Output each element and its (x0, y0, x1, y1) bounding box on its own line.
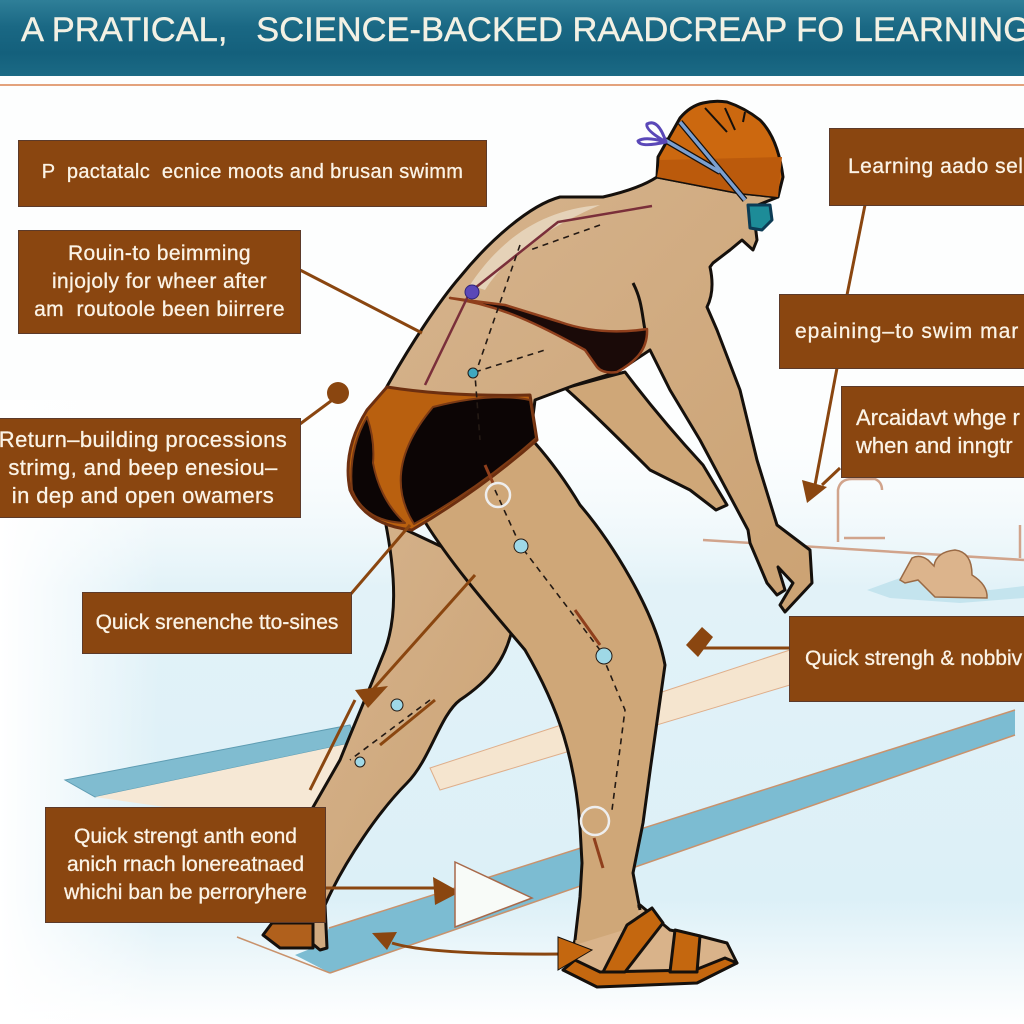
swimsuit bottom black panel (401, 397, 536, 524)
pool deck strip right (430, 650, 790, 790)
pool deck strip left (95, 742, 356, 815)
label: beginning to swim: epaining–to swim mar (795, 320, 1019, 342)
title: A PRATICAL, SCIENCE-BACKED RAADCREAP FO LEARNING (21, 11, 1024, 49)
distant swimmer (867, 550, 1024, 603)
label: quick sequence: Quick srenenche tto-sines (96, 611, 338, 634)
pool edge and ladder (703, 479, 1024, 560)
goggle lens (748, 205, 772, 230)
far arm (565, 372, 727, 510)
sandal rear (263, 923, 313, 948)
swimsuit top (450, 298, 647, 372)
swimmer figure (263, 101, 812, 987)
anatomy guides (350, 225, 625, 810)
water wash background (0, 400, 1024, 1024)
label: return to swimming (18, 230, 301, 334)
armpit line (633, 283, 645, 330)
label: return to swimming: Rouin-to beimming injojoly for wheer after am routoole been biirrere (34, 242, 285, 321)
foot front (568, 905, 737, 975)
sandal sole (563, 958, 737, 987)
label: top left (18, 140, 487, 207)
label: quick strength right: Quick strengh & nobbiv (805, 647, 1022, 670)
label: learning (829, 128, 1024, 206)
back leg (290, 520, 512, 950)
label: arcadavt: Arcaidavt whge r when and inngtr (856, 405, 1020, 458)
callout arrows (300, 205, 865, 954)
label: beginning to swim (779, 294, 1024, 369)
front leg (425, 443, 665, 945)
sandal heel strap (603, 908, 663, 972)
goggle tie (638, 123, 666, 145)
white pennant (455, 862, 532, 927)
label: quick strength lower left (45, 807, 326, 923)
label: top left: P pactatalc ecnice moots and brusan swimm (42, 160, 463, 182)
label: quick strength right (789, 616, 1024, 702)
pool lane band right (295, 710, 1015, 973)
swim cap (657, 101, 783, 197)
label: quick sequence (82, 592, 352, 654)
goggle strap (665, 122, 745, 200)
label: quick strength lower left: Quick strengt anth eond anich rnach lonereatnaed whichi ban be perroryhere (64, 825, 307, 904)
pool lane band left (65, 725, 356, 797)
label: arcadavt (841, 386, 1024, 478)
header rule (0, 84, 1024, 86)
label: learning: Learning aado sel (848, 155, 1023, 178)
upper back highlight (470, 205, 600, 290)
torso and near arm (385, 177, 812, 612)
swimsuit straps (425, 206, 652, 385)
arrowheads and dots (327, 382, 827, 970)
label: return building: Return–building processions strimg, and beep enesiou– in dep and open owamers (0, 427, 287, 508)
title (0, 0, 1024, 76)
sandal toe strap (670, 930, 700, 972)
swimsuit bottom left panel (351, 417, 405, 523)
swimsuit bottom (348, 387, 537, 530)
leg accent lines (485, 465, 603, 868)
joint markers (355, 285, 612, 835)
